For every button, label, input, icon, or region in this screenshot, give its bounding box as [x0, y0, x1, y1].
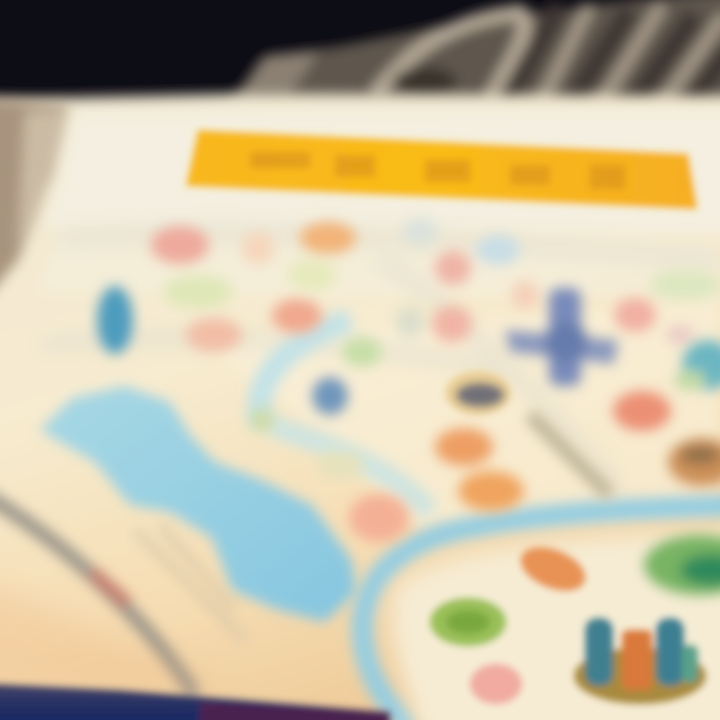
bottom blue edge — [0, 682, 390, 720]
map markers, upper rows — [151, 218, 720, 367]
map markers, lower land — [430, 539, 592, 704]
title banner — [186, 130, 697, 209]
icon: blue building near river — [312, 377, 348, 415]
warm vignette bottom left — [0, 570, 230, 690]
icon: blue cross — [505, 288, 618, 386]
icon: dark emblem centre — [445, 371, 511, 415]
icon: teal marker right edge — [674, 340, 720, 390]
map faint road lines — [40, 233, 720, 490]
faint bottom left lines — [135, 525, 245, 640]
icon: blue marker left — [97, 286, 133, 354]
banner text smudges — [250, 152, 625, 189]
lower right land — [392, 530, 720, 720]
map markers, middle rows — [250, 391, 671, 542]
background: sketched strokes top right — [225, 0, 720, 130]
icon: brown marker right edge — [668, 438, 720, 486]
lake — [40, 386, 356, 622]
icon: green island right — [644, 535, 720, 595]
winding river — [259, 320, 720, 720]
left grey folded sheet — [0, 95, 68, 330]
icon: colourful towers — [574, 618, 706, 704]
road curve bottom left — [0, 495, 195, 695]
